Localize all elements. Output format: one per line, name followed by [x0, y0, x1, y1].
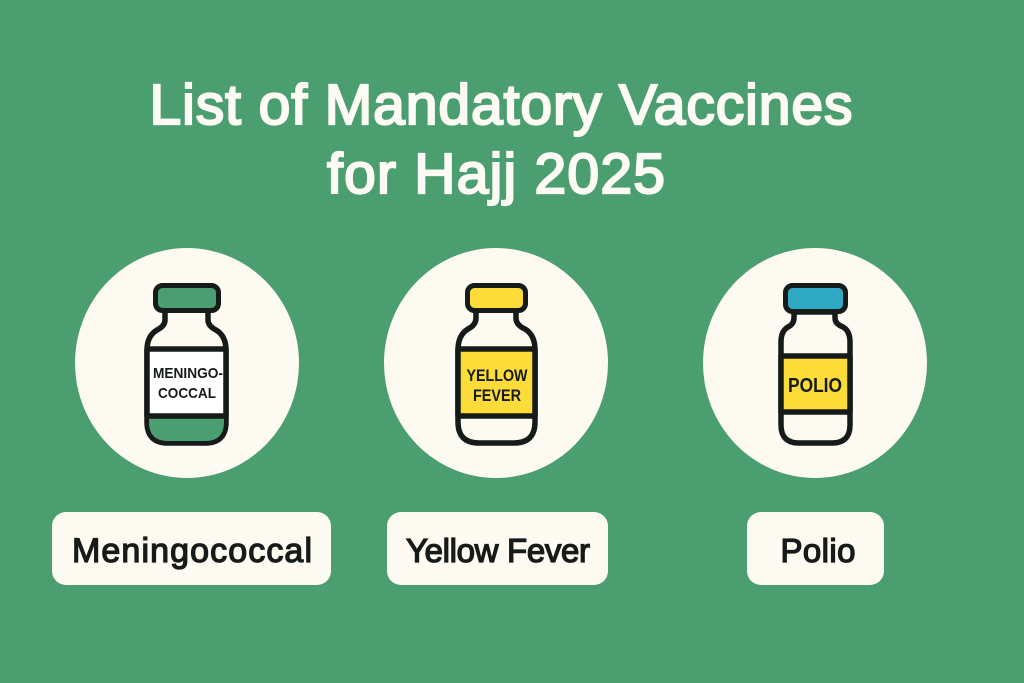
label: Yellow Fever: [387, 512, 608, 585]
panel: Yellow Fever circle: [384, 248, 608, 478]
title: List of Mandatory Vaccines: [150, 73, 852, 137]
title: [150, 73, 852, 206]
label: Yellow Fever: Yellow Fever: [406, 532, 590, 569]
icon: Yellow Fever vial: [458, 286, 535, 443]
label: Polio: [747, 512, 884, 585]
vial label: Meningococcal: MENINGO-: [153, 365, 223, 382]
panel: Meningococcal circle: [75, 248, 299, 478]
label: Meningococcal: [52, 512, 331, 585]
icon: Meningococcal vial: [147, 286, 226, 443]
vial label: Yellow Fever: YELLOW: [466, 366, 528, 385]
label: Polio: Polio: [780, 532, 856, 569]
label: Meningococcal: Meningococcal: [72, 532, 312, 570]
vial label: Meningococcal: COCCAL: [158, 385, 216, 402]
vial label: Polio: POLIO: [788, 375, 842, 397]
vial label: Meningococcal: [153, 365, 223, 402]
vial label: Yellow Fever: [466, 366, 528, 405]
vial label: Yellow Fever: FEVER: [473, 386, 521, 405]
title: for Hajj 2025: [327, 142, 665, 206]
panel: Polio circle: [703, 248, 927, 478]
icon: Polio vial: [781, 286, 850, 443]
